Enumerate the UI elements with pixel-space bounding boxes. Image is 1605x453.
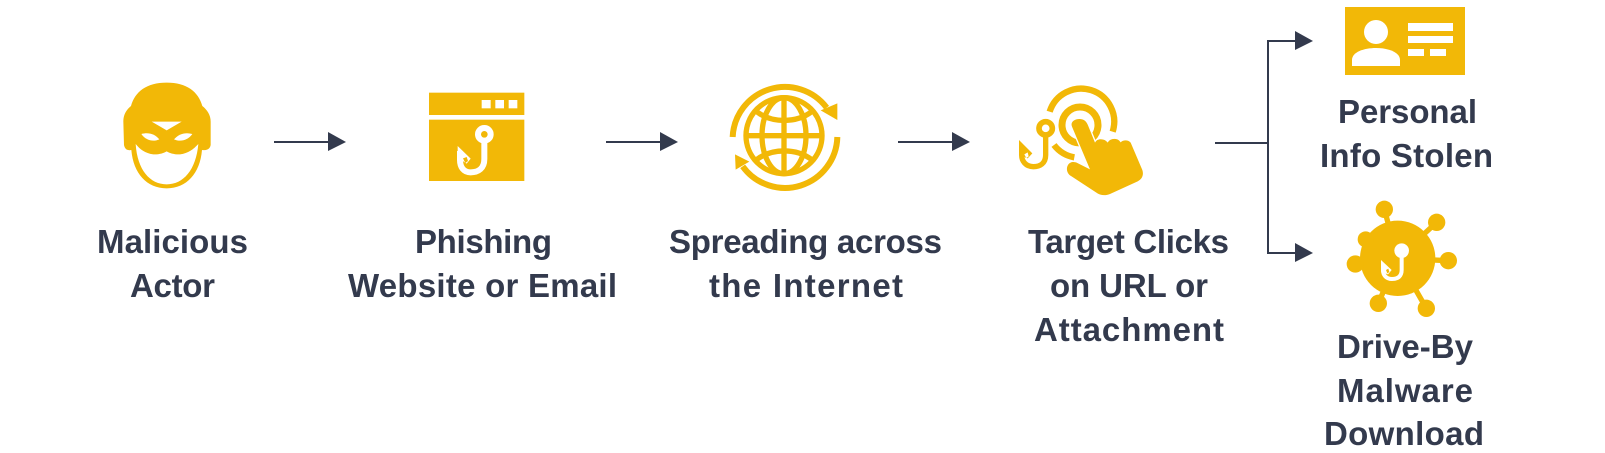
label: Drive-By Malware Download: Drive-By	[1337, 328, 1474, 365]
label: Target Clicks on URL or Attachment: Target Clicks	[1028, 223, 1229, 260]
label: Phishing Website or Email: Website or Email	[348, 267, 617, 304]
icon: masked actor	[123, 83, 211, 188]
label: Phishing Website or Email	[348, 223, 617, 304]
label: Target Clicks on URL or Attachment	[1028, 223, 1229, 348]
arrow: internet to target	[898, 132, 970, 151]
icon: browser window with hook	[429, 93, 524, 181]
step: malicious actor	[97, 83, 248, 304]
label: Phishing Website or Email: Phishing	[415, 223, 552, 260]
label: Spreading across the Internet: Spreading across	[669, 223, 942, 260]
label: Malicious Actor: Actor	[130, 267, 215, 304]
icon part: pointing hand	[1067, 119, 1143, 195]
label: Target Clicks on URL or Attachment: on URL or	[1050, 267, 1208, 304]
label: Drive-By Malware Download	[1324, 328, 1484, 452]
label: Spreading across the Internet	[669, 223, 942, 304]
label: Malicious Actor: Malicious	[97, 223, 248, 260]
label: Personal Info Stolen	[1320, 93, 1493, 174]
label: Drive-By Malware Download: Malware	[1337, 372, 1473, 409]
label: Spreading across the Internet: the Internet	[709, 267, 903, 304]
step: phishing website or email	[348, 93, 617, 304]
icon: hook and clicking hand	[1019, 89, 1143, 195]
label: Personal Info Stolen: Info Stolen	[1320, 137, 1493, 174]
arrow: actor to website	[274, 132, 346, 151]
icon: identity card	[1345, 7, 1465, 75]
label: Personal Info Stolen: Personal	[1338, 93, 1477, 130]
icon: virus with hook	[1347, 201, 1457, 317]
arrow: branching connector to two outcomes	[1215, 31, 1313, 262]
step: drive-by malware download	[1324, 201, 1484, 452]
label: Drive-By Malware Download: Download	[1324, 415, 1484, 452]
arrow: website to internet	[606, 132, 678, 151]
label: Malicious Actor	[97, 223, 248, 304]
icon: globe with circular arrows	[733, 87, 837, 188]
step: personal info stolen	[1320, 7, 1493, 174]
step: target clicks on url or attachment	[1019, 89, 1229, 348]
label: Target Clicks on URL or Attachment: Attachment	[1034, 311, 1224, 348]
step: spreading across the internet	[669, 87, 942, 304]
